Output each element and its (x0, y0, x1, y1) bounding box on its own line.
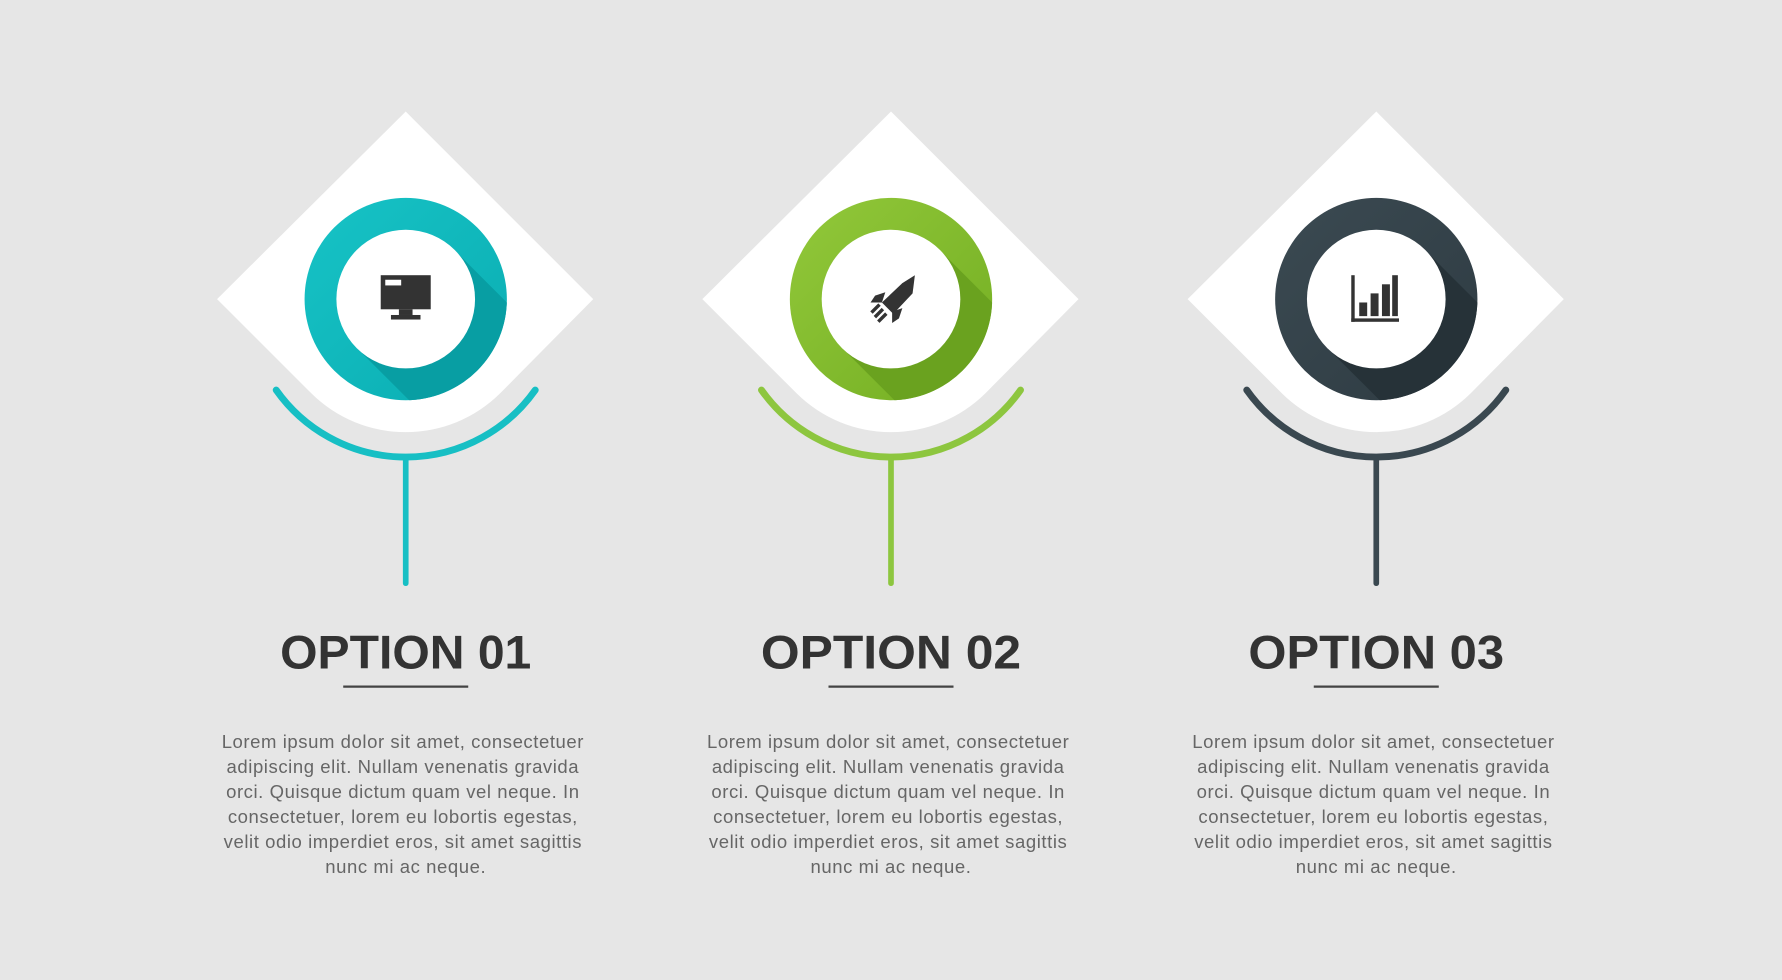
ring 3 (1275, 198, 1478, 400)
connector arc 3 (1247, 390, 1506, 457)
stem 1 (403, 457, 408, 583)
heading 3: OPTION 03 (1248, 626, 1504, 679)
body text 2: Lorem ipsum dolor sit amet, consectetuer (707, 731, 1069, 752)
ring 2 (790, 198, 992, 400)
ring 1 (304, 198, 507, 400)
body text 3: Lorem ipsum dolor sit amet, consectetuer (1192, 731, 1555, 752)
body text 1: consectetuer, lorem eu lobortis egestas, (228, 806, 578, 827)
panel: option 03 (1188, 112, 1564, 877)
body text 3: consectetuer, lorem eu lobortis egestas, (1198, 806, 1548, 827)
body text 2: velit odio imperdiet eros, sit amet sagittis (709, 831, 1067, 852)
connector arc 2 (761, 390, 1021, 457)
stem 3 (1374, 457, 1379, 583)
stem 2 (888, 457, 894, 583)
panel: option 02 (702, 112, 1078, 877)
body text 1: orci. Quisque dictum quam vel neque. In (226, 781, 580, 802)
diamond background 3 (1188, 112, 1564, 432)
body text 1: velit odio imperdiet eros, sit amet sagittis (224, 831, 582, 852)
body text 3: orci. Quisque dictum quam vel neque. In (1197, 781, 1550, 802)
heading 2: OPTION 02 (761, 626, 1021, 679)
body text 3: adipiscing elit. Nullam venenatis gravida (1197, 756, 1550, 777)
body text 1: adipiscing elit. Nullam venenatis gravida (227, 756, 579, 777)
icon: rocket (870, 275, 915, 323)
icon: monitor (381, 275, 431, 320)
panel: option 01 (217, 112, 593, 877)
body text 2: adipiscing elit. Nullam venenatis gravida (712, 756, 1065, 777)
body text 2: nunc mi ac neque. (811, 856, 971, 877)
icon: bar chart (1351, 275, 1399, 322)
body text 3: velit odio imperdiet eros, sit amet sagittis (1194, 831, 1553, 852)
body text 1: nunc mi ac neque. (325, 856, 486, 877)
connector arc 1 (276, 390, 535, 457)
body text 3: nunc mi ac neque. (1296, 856, 1457, 877)
heading 1: OPTION 01 (280, 626, 531, 679)
body text 1: Lorem ipsum dolor sit amet, consectetuer (222, 731, 584, 752)
diamond background 2 (702, 112, 1079, 432)
body text 2: orci. Quisque dictum quam vel neque. In (711, 781, 1065, 802)
body text 2: consectetuer, lorem eu lobortis egestas, (713, 806, 1063, 827)
diamond background 1 (217, 112, 593, 432)
